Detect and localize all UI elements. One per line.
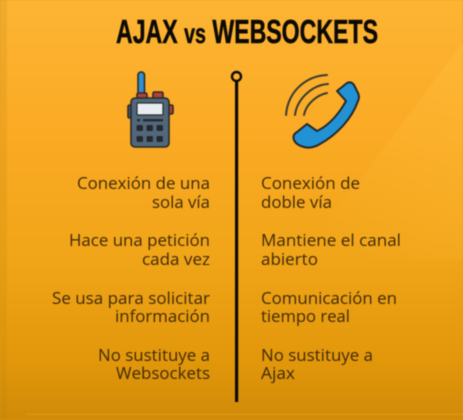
- left column text: Conexión de una: [77, 171, 210, 194]
- icon: phone with signal waves: [286, 75, 359, 148]
- left column text: Se usa para solicitar: [52, 286, 210, 309]
- right column text: doble vía: [261, 190, 332, 213]
- right column text: No sustituye a: [261, 343, 373, 366]
- left column text: sola vía: [152, 190, 210, 213]
- right column text: [261, 171, 401, 384]
- left column text: [52, 171, 210, 384]
- right column text: Mantiene el canal: [261, 228, 401, 251]
- center divider line: [232, 72, 241, 402]
- right column text: tiempo real: [261, 304, 350, 327]
- right column text: abierto: [261, 247, 318, 270]
- title: AJAX vs WEBSOCKETS: [116, 13, 378, 50]
- right column text: Conexión de: [261, 171, 360, 194]
- icon: walkie-talkie: [128, 72, 173, 147]
- left column text: cada vez: [142, 247, 210, 270]
- right column text: Ajax: [261, 361, 295, 384]
- left column text: Websockets: [116, 361, 210, 384]
- left column text: No sustituye a: [98, 343, 210, 366]
- left column text: Hace una petición: [69, 228, 210, 251]
- right column text: Comunicación en: [261, 286, 397, 309]
- left column text: información: [115, 304, 210, 327]
